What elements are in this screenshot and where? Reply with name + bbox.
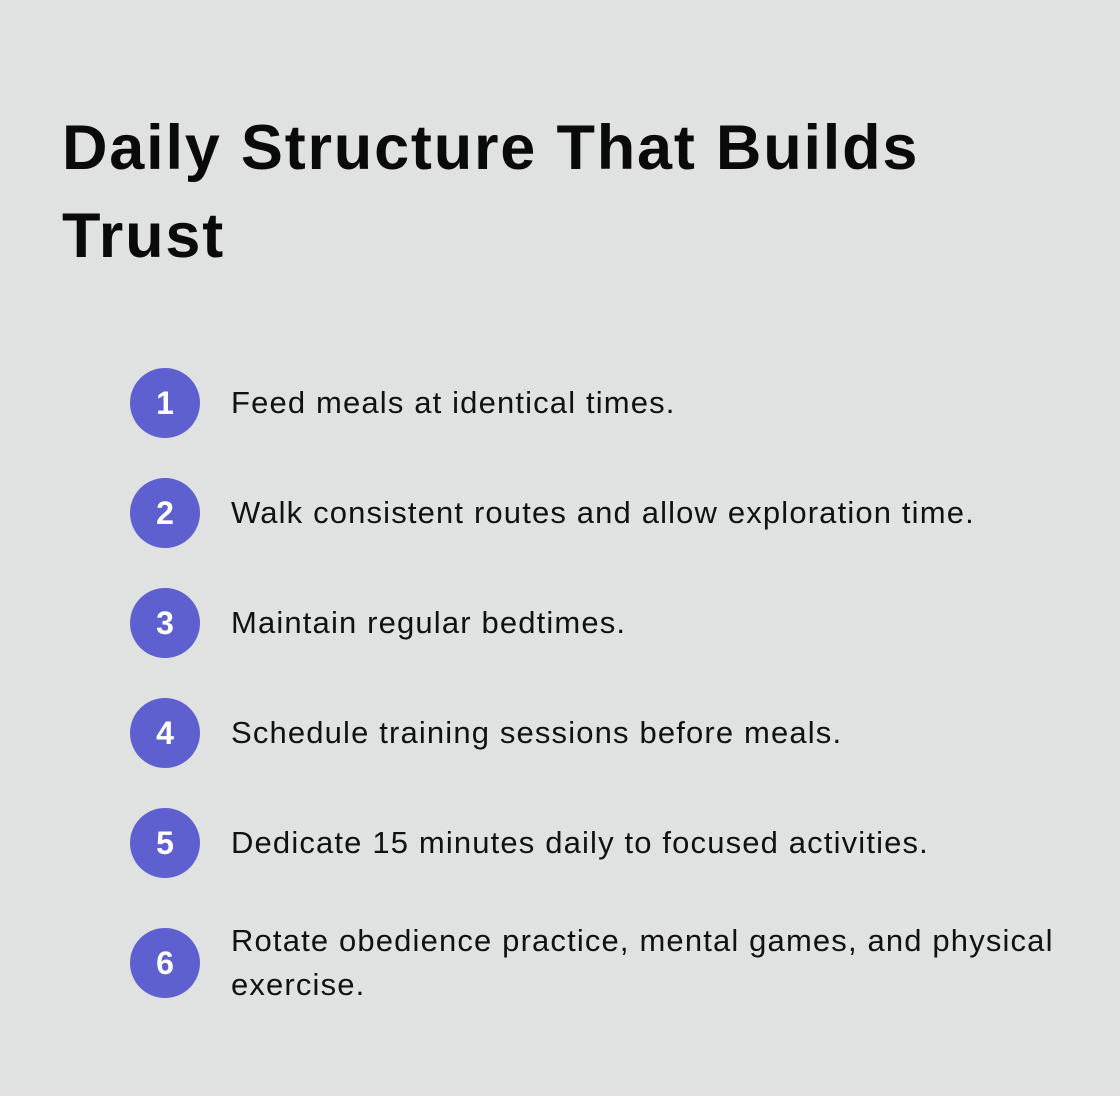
item 2	[130, 478, 975, 548]
title: Daily Structure That Builds	[62, 113, 919, 183]
item 5	[130, 808, 929, 878]
item 2: 2	[156, 495, 174, 531]
item 4: 4	[156, 715, 174, 751]
item 3	[130, 588, 626, 658]
title: Trust	[62, 201, 225, 271]
title	[62, 113, 919, 271]
item 2: Walk consistent routes and allow exploration time.	[231, 495, 975, 530]
item 3: 3	[156, 605, 174, 641]
item 6: exercise.	[231, 967, 365, 1002]
item 6: Rotate obedience practice, mental games, and physical	[231, 923, 1054, 958]
item 4: Schedule training sessions before meals.	[231, 715, 842, 750]
item 6: 6	[156, 945, 174, 981]
item 1	[130, 368, 676, 438]
item 4	[130, 698, 842, 768]
item 5: Dedicate 15 minutes daily to focused activities.	[231, 825, 929, 860]
item 3: Maintain regular bedtimes.	[231, 605, 626, 640]
item 5: 5	[156, 825, 174, 861]
item 1: 1	[156, 385, 174, 421]
item 1: Feed meals at identical times.	[231, 385, 676, 420]
item 6	[130, 923, 1054, 1002]
